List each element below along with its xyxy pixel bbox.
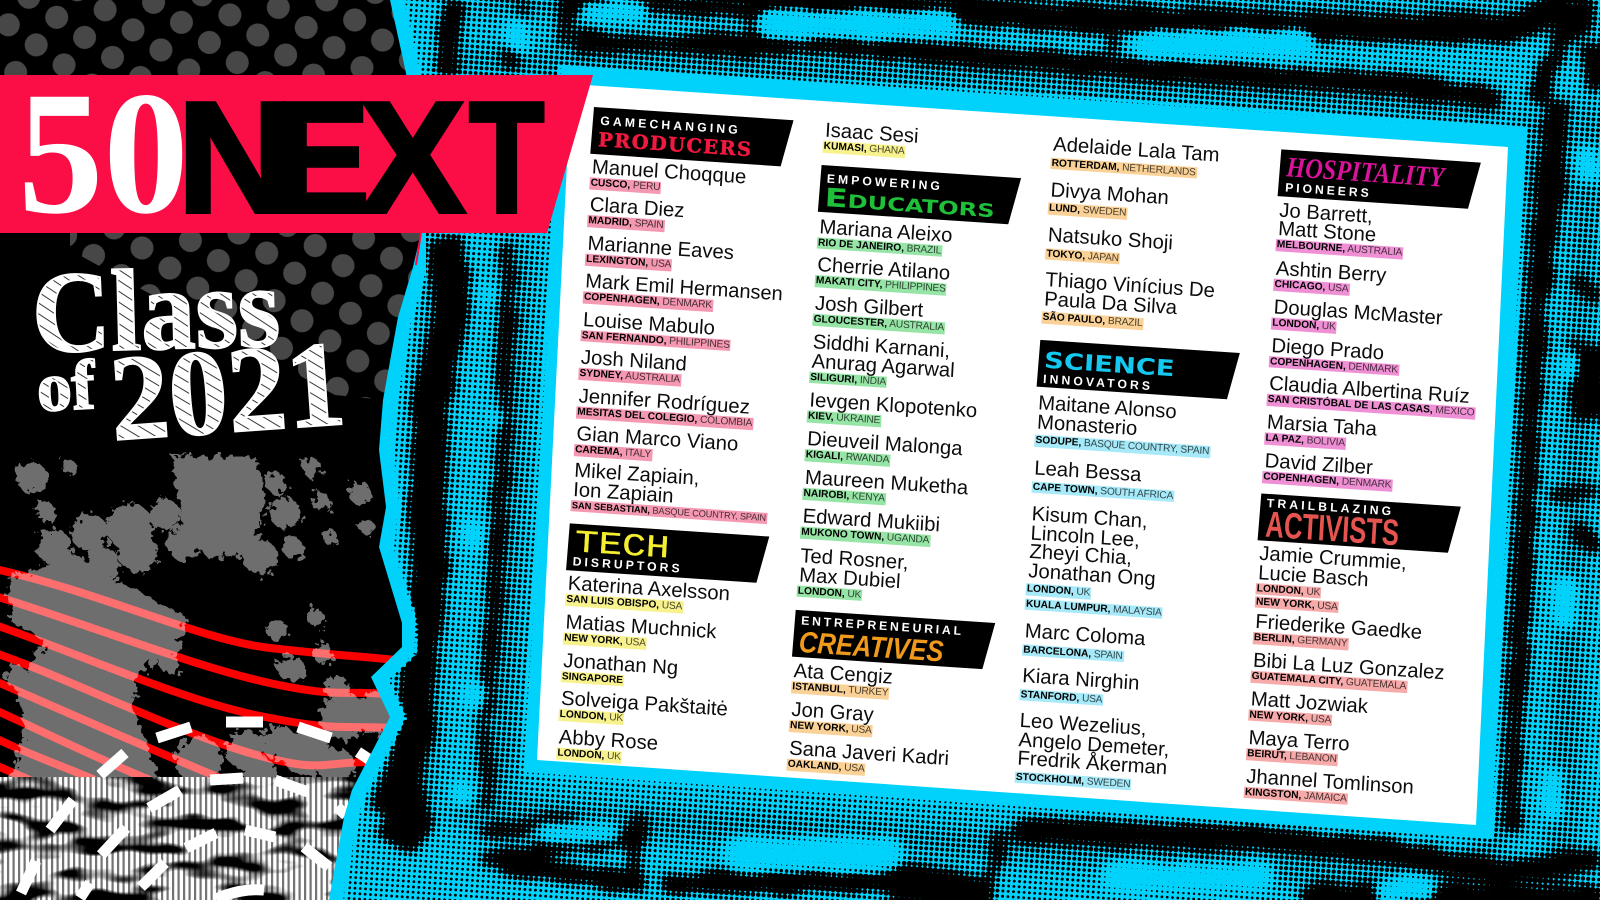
section: entrepreneurial creatives: ENTREPRENEURIAL	[801, 614, 962, 638]
entry: Josh Gilbert: GLOUCESTER, AUSTRALIA	[813, 314, 944, 333]
section: hospitality pioneers: HOSPITALITY	[1285, 152, 1447, 194]
entry: Mikel and Ion Zapiain: Ion Zapiain	[573, 478, 674, 507]
entry: Jamie Crummie and Lucie Basch: LONDON, UK	[1257, 583, 1320, 598]
honoree lists	[556, 107, 1481, 805]
entry: Ted Rosner and Max Dubiel: Max Dubiel	[799, 564, 901, 593]
entry: Jamie Crummie and Lucie Basch	[1256, 544, 1407, 617]
entry: Jamie Crummie and Lucie Basch: Lucie Basch	[1258, 561, 1369, 591]
white dashed arcs	[21, 722, 370, 899]
entry: Diego Prado: Diego Prado	[1271, 334, 1385, 364]
entry: Louise Mabulo: Louise Mabulo	[583, 308, 716, 339]
left collage panel	[0, 0, 422, 900]
entry: Natsuko Shoji: Natsuko Shoji	[1047, 224, 1174, 255]
logo: NEXT: X	[360, 70, 465, 246]
entry: Marsia Taha: Marsia Taha	[1266, 411, 1378, 441]
logo: NEXT: T	[469, 70, 544, 247]
entry: Leo Wezelius, Angelo Demeter, Fredrik Akerman	[1016, 712, 1171, 793]
entry: Mark Emil Hermansen: Mark Emil Hermansen	[585, 270, 783, 305]
entry: Jhannel Tomlinson: KINGSTON, JAMAICA	[1245, 786, 1347, 804]
entry: Mark Emil Hermansen: COPENHAGEN, DENMARK	[584, 291, 712, 311]
entry: Maya Terro: BEIRUT, LEBANON	[1247, 748, 1337, 765]
entry: Maureen Muketha: NAIROBI, KENYA	[803, 488, 885, 504]
entry: Ata Cengiz: Ata Cengiz	[793, 660, 893, 689]
entry: Edward Mukiibi: MUKONO TOWN, UGANDA	[801, 526, 930, 546]
entry: Jon Gray: Jon Gray	[791, 699, 874, 727]
entry: Friederike Gaedke: BERLIN, GERMANY	[1254, 632, 1348, 649]
entry: Bibi La Luz Gonzalez: GUATEMALA CITY, GUATEMALA	[1251, 671, 1406, 692]
section: empowering educators	[796, 165, 1022, 601]
section: trailblazing activists: ACTIVISTS	[1264, 504, 1400, 553]
entry: Louise Mabulo: SAN FERNANDO, PHILIPPINES	[581, 330, 730, 350]
section: empowering educators: EDUCATORS	[824, 183, 996, 224]
entry: Abby Rose: LONDON, UK	[557, 747, 621, 763]
entry: Ievgen Klopotenko: KIEV, UKRAINE	[808, 410, 880, 426]
entry: Jonathan Ng: SINGAPORE	[562, 671, 623, 686]
entry: Friederike Gaedke: Friederike Gaedke	[1255, 611, 1423, 644]
entry: Jo Barrett and Matt Stone: Jo Barrett,	[1279, 199, 1373, 227]
entry: Ted Rosner and Max Dubiel: Ted Rosner,	[800, 545, 909, 574]
fabric texture strip	[0, 777, 360, 900]
entry: Maitane Alonso Monasterio: SODUPE, BASQUE COUNTRY, SPAIN	[1035, 435, 1210, 457]
entry: Diego Prado: COPENHAGEN, DENMARK	[1270, 356, 1398, 375]
entry: Jamie Crummie and Lucie Basch: Jamie Crummie,	[1259, 542, 1407, 575]
section: trailblazing activists	[1244, 493, 1470, 813]
entry: Jonathan Ng: Jonathan Ng	[563, 649, 679, 679]
entry: Marc Coloma	[1023, 622, 1146, 664]
grey ink blotches	[9, 460, 395, 790]
entry: Katerina Axelsson: Katerina Axelsson	[567, 572, 731, 605]
entry: Jennifer Rodriguez: Jennifer Rodríguez	[578, 385, 750, 419]
entry: Josh Gilbert: Josh Gilbert	[814, 292, 924, 322]
section: hospitality pioneers	[1262, 149, 1490, 494]
entry: Maya Terro: Maya Terro	[1248, 727, 1350, 756]
entry: Maitane Alonso Monasterio: Monasterio	[1036, 411, 1138, 440]
entry: Jon Gray: NEW YORK, USA	[790, 720, 872, 737]
entry: Kisum Chan, Lincoln Lee, Zheyi Chia, Jonathan Ong: KUALA LUMPUR, MALAYSIA	[1026, 598, 1162, 618]
entry: Thiago Vinicius De Paula Da Silva: SÃO PAULO, BRAZIL	[1042, 311, 1143, 329]
class of 2021 lettering	[30, 244, 349, 467]
entry: Siddhi Karnani and Anurag Agarwal	[808, 331, 955, 388]
entry: Marc Coloma: BARCELONA, SPAIN	[1023, 644, 1123, 662]
entry: Thiago Vinicius De Paula Da Silva: Thiago Vinícius De	[1045, 269, 1216, 302]
logo: NEXT	[177, 69, 544, 247]
entry: Jo Barrett and Matt Stone: MELBOURNE, AUSTRALIA	[1276, 239, 1402, 259]
entry: Mariana Aleixo: Mariana Aleixo	[819, 215, 953, 247]
entry: Ata Cengiz: ISTANBUL, TURKEY	[792, 681, 889, 699]
entry: Claudia Albertina Ruiz: Claudia Albertina Ruíz	[1269, 372, 1470, 408]
entry: Ted Rosner and Max Dubiel	[796, 545, 909, 601]
entry: Divya Mohan: LUND, SWEDEN	[1049, 203, 1127, 219]
entry: Ashtin Berry: Ashtin Berry	[1275, 257, 1387, 287]
entry: Leah Bessa	[1032, 457, 1175, 502]
section: tech disruptors	[556, 523, 770, 764]
entry: Siddhi Karnani and Anurag Agarwal: Anurag Agarwal	[811, 350, 955, 382]
entry: Manuel Choqque: CUSCO, PERU	[590, 177, 661, 193]
entry: Leah Bessa: CAPE TOWN, SOUTH AFRICA	[1032, 481, 1173, 501]
entry: Isaac Sesi: Isaac Sesi	[824, 119, 919, 148]
logo: NEXT: N	[177, 69, 295, 245]
entry: Clara Diez: Clara Diez	[589, 194, 685, 222]
entry: Edward Mukiibi: Edward Mukiibi	[802, 505, 941, 537]
entry: Leo Wezelius, Angelo Demeter, Fredrik Akerman: Leo Wezelius,	[1019, 710, 1147, 740]
entry: Marc Coloma: Marc Coloma	[1024, 620, 1146, 650]
section: trailblazing activists: TRAILBLAZING	[1266, 496, 1391, 518]
section: science innovators: INNOVATORS	[1043, 372, 1150, 393]
entry: Adelaide Lala Tam: Adelaide Lala Tam	[1053, 133, 1220, 167]
entry: Abby Rose: Abby Rose	[558, 726, 659, 755]
entry: Jhannel Tomlinson: Jhannel Tomlinson	[1246, 765, 1414, 798]
section: gamechanging producers: PRODUCERS	[598, 128, 752, 161]
entry: Sana Javeri Kadri: Sana Javeri Kadri	[789, 737, 950, 770]
entry: Kiara Nirghin: Kiara Nirghin	[1022, 665, 1140, 695]
entry: Kisum Chan, Lincoln Lee, Zheyi Chia, Jonathan Ong: LONDON, UK	[1027, 583, 1090, 599]
entry: Kisum Chan, Lincoln Lee, Zheyi Chia, Jonathan Ong: Jonathan Ong	[1028, 559, 1156, 590]
section: tech disruptors: DISRUPTORS	[572, 554, 680, 575]
entry: Maitane Alonso Monasterio	[1034, 392, 1211, 458]
entry: Josh Gilbert	[812, 292, 946, 334]
entry: Jo Barrett and Matt Stone	[1277, 201, 1406, 259]
entry: Marsia Taha	[1266, 413, 1377, 451]
class of 2021 lettering: 2021	[105, 316, 349, 467]
entry: Matt Jozwiak: Matt Jozwiak	[1250, 688, 1369, 718]
entry: Clara Diez: MADRID, SPAIN	[588, 215, 664, 231]
entry: Katerina Axelsson: SAN LUIS OBISPO, USA	[566, 594, 682, 613]
entry: Louise Mabulo	[580, 308, 731, 351]
entry: Claudia Albertina Ruiz	[1268, 374, 1477, 419]
entry: Mikel and Ion Zapiain	[570, 459, 768, 524]
entry: Claudia Albertina Ruiz: SAN CRISTÓBAL DE LAS CASAS, MEXICO	[1267, 394, 1475, 419]
entry: Ievgen Klopotenko: Ievgen Klopotenko	[809, 389, 978, 423]
entry: Matias Muchnick: NEW YORK, USA	[564, 632, 646, 649]
section: tech disruptors: TECH	[574, 526, 670, 567]
section: hospitality pioneers: PIONEERS	[1285, 181, 1369, 200]
entry: Natsuko Shoji: TOKYO, JAPAN	[1046, 248, 1119, 264]
logo: 50: 50	[18, 55, 189, 251]
entry: Leah Bessa: Leah Bessa	[1034, 457, 1142, 487]
entry: Jennifer Rodriguez: MESITAS DEL COLEGIO, COLOMBIA	[577, 406, 752, 429]
polka dot texture	[0, 0, 430, 420]
entry: Kiara Nirghin	[1021, 667, 1140, 708]
entry: Marsia Taha: LA PAZ, BOLIVIA	[1265, 432, 1345, 449]
entry: Kisum Chan, Lincoln Lee, Zheyi Chia, Jonathan Ong: Lincoln Lee,	[1030, 522, 1140, 551]
section: gamechanging producers: GAMECHANGING	[600, 114, 738, 137]
entry: Marianne Eaves: LEXINGTON, USA	[586, 254, 671, 270]
entry: Douglas McMaster: LONDON, UK	[1272, 317, 1336, 333]
entry: Mikel and Ion Zapiain: Mikel Zapiain,	[574, 459, 700, 490]
entry: Jo Barrett and Matt Stone: Matt Stone	[1278, 218, 1377, 247]
entry: Leo Wezelius, Angelo Demeter, Fredrik Akerman: STOCKHOLM, SWEDEN	[1016, 771, 1131, 790]
class of 2021 lettering: Class	[30, 244, 282, 378]
entry: Sana Javeri Kadri: OAKLAND, USA	[787, 759, 865, 775]
section: entrepreneurial creatives: CREATIVES	[798, 626, 945, 668]
entry: David Zilber: David Zilber	[1264, 450, 1373, 479]
entry: Mariana Aleixo: RIO DE JANEIRO, BRAZIL	[818, 237, 941, 256]
entry: Ted Rosner and Max Dubiel: LONDON, UK	[798, 585, 861, 600]
section: creatives continued	[1041, 133, 1220, 330]
entry: Douglas McMaster: Douglas McMaster	[1273, 296, 1443, 330]
entry: Maya Terro	[1247, 729, 1350, 766]
entry: Marianne Eaves: Marianne Eaves	[587, 232, 735, 264]
entry: Gian Marco Viano: Gian Marco Viano	[576, 423, 739, 456]
entry: Gian Marco Viano: CAREMA, ITALY	[575, 444, 651, 460]
entry: Josh Niland: SYDNEY, AUSTRALIA	[579, 368, 680, 386]
entry: Diego Prado	[1270, 336, 1400, 376]
entry: Solveiga Pakstaite: LONDON, UK	[559, 709, 623, 724]
entry: Maureen Muketha: Maureen Muketha	[804, 466, 969, 500]
entry: Kiara Nirghin: STANFORD, USA	[1020, 689, 1103, 705]
section: science innovators: SCIENCE	[1043, 348, 1175, 382]
entry: David Zilber: COPENHAGEN, DENMARK	[1263, 471, 1392, 491]
entry: Solveiga Pakstaite: Solveiga Pakštaitė	[560, 687, 728, 721]
entry: Matt Jozwiak	[1250, 690, 1368, 728]
entry: Kisum Chan, Lincoln Lee, Zheyi Chia, Jonathan Ong: Zheyi Chia,	[1029, 541, 1133, 570]
entry: Bibi La Luz Gonzalez: Bibi La Luz Gonzalez	[1252, 649, 1445, 684]
entry: Maitane Alonso Monasterio: Maitane Alonso	[1038, 392, 1177, 423]
section: empowering educators: EMPOWERING	[827, 172, 940, 193]
entry: Kisum Chan, Lincoln Lee, Zheyi Chia, Jonathan Ong: Kisum Chan,	[1031, 503, 1148, 533]
entry: Siddhi Karnani and Anurag Agarwal: Siddhi Karnani,	[812, 331, 951, 362]
entry: Isaac Sesi: KUMASI, GHANA	[823, 141, 905, 157]
entry: Cherrie Atilano: MAKATI CITY, PHILIPPINES	[816, 275, 946, 295]
entry: Matias Muchnick: Matias Muchnick	[565, 611, 717, 643]
entry: Siddhi Karnani and Anurag Agarwal: SILIGURI, INDIA	[810, 371, 886, 387]
entry: Leo Wezelius, Angelo Demeter, Fredrik Akerman: Angelo Demeter,	[1018, 728, 1170, 761]
entry: David Zilber	[1263, 452, 1394, 491]
section: science innovators	[1014, 340, 1240, 790]
entry: Matt Jozwiak: NEW YORK, USA	[1249, 709, 1331, 726]
red wavy lines	[0, 569, 395, 780]
entry: Thiago Vinicius De Paula Da Silva	[1041, 269, 1216, 330]
entry: Josh Niland: Josh Niland	[580, 346, 687, 376]
entry: Adelaide Lala Tam: ROTTERDAM, NETHERLANDS	[1051, 157, 1196, 178]
entry: Divya Mohan: Divya Mohan	[1050, 179, 1169, 209]
entry: Jamie Crummie and Lucie Basch: NEW YORK, USA	[1256, 596, 1338, 612]
entry: Kisum Chan, Lincoln Lee, Zheyi Chia, Jonathan Ong	[1026, 505, 1168, 619]
class of 2021 lettering: of	[35, 347, 97, 427]
section: gamechanging producers	[570, 107, 794, 524]
entry: Ashtin Berry	[1275, 259, 1387, 298]
entry: Dieuveil Malonga: KIGALI, RWANDA	[805, 449, 890, 466]
entry: Leo Wezelius, Angelo Demeter, Fredrik Akerman: Fredrik Åkerman	[1017, 747, 1168, 779]
entry: Thiago Vinicius De Paula Da Silva: Paula Da Silva	[1044, 288, 1178, 319]
entry: Dieuveil Malonga: Dieuveil Malonga	[807, 428, 963, 460]
entry: Mikel and Ion Zapiain: SAN SEBASTIAN, BASQUE COUNTRY, SPAIN	[572, 500, 766, 523]
logo: NEXT: E	[275, 69, 370, 246]
entry: Ashtin Berry: CHICAGO, USA	[1274, 279, 1349, 295]
entry: Manuel Choqque: Manuel Choqque	[591, 156, 747, 189]
section: entrepreneurial creatives	[786, 610, 996, 776]
entry: Cherrie Atilano: Cherrie Atilano	[817, 254, 951, 285]
